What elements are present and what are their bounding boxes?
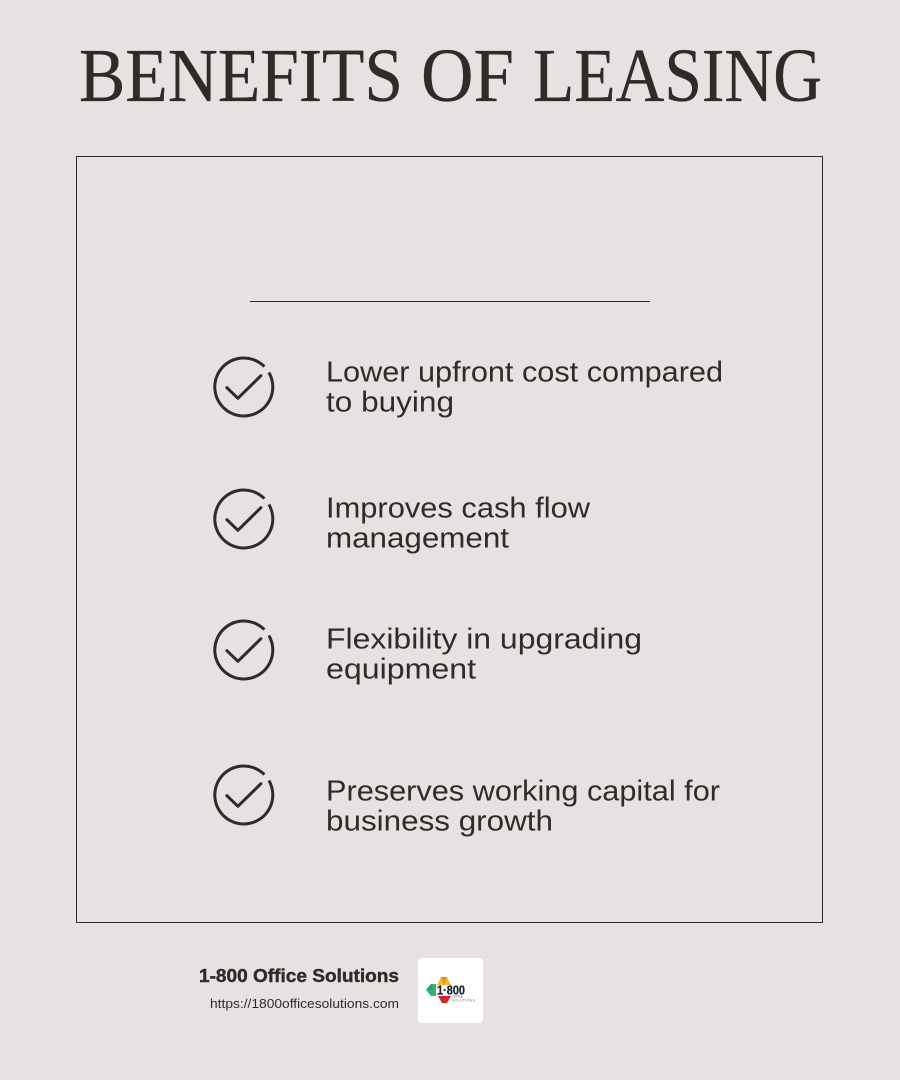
logo small text: SOLUTIONS bbox=[452, 998, 476, 1002]
benefit 2 text: Improves cash flow bbox=[326, 492, 590, 524]
logo tile bbox=[418, 958, 483, 1023]
title: LEASING bbox=[533, 34, 822, 118]
benefit 1 text: to buying bbox=[326, 386, 454, 418]
title: BENEFITS bbox=[79, 34, 403, 118]
logo mark: yellow bbox=[437, 977, 451, 985]
benefit 3 bbox=[215, 621, 642, 686]
logo small text: OFFICE bbox=[452, 995, 464, 999]
logo mark: orange facet bbox=[441, 977, 447, 985]
icon: check circle 2 bbox=[215, 490, 273, 548]
title: OF bbox=[421, 34, 514, 118]
logo mark: red bbox=[438, 996, 451, 1003]
benefit 1 bbox=[215, 356, 723, 418]
benefit 4 bbox=[215, 766, 721, 838]
icon: check circle 3 bbox=[215, 621, 273, 679]
footer company name: 1-800 Office Solutions bbox=[199, 966, 399, 986]
logo mark: teal facet bbox=[426, 984, 433, 990]
benefit 2 bbox=[215, 490, 590, 554]
benefit 2 text: management bbox=[326, 522, 509, 554]
logo mark: green bbox=[426, 984, 436, 996]
logo numerals: 1·800 bbox=[437, 984, 465, 998]
benefit 3 text: equipment bbox=[326, 654, 476, 686]
benefit 4 text: Preserves working capital for bbox=[326, 776, 721, 808]
footer url: https://1800officesolutions.com bbox=[210, 996, 399, 1011]
logo bbox=[418, 958, 483, 1023]
benefit 3 text: Flexibility in upgrading bbox=[326, 624, 642, 656]
benefit 4 text: business growth bbox=[326, 806, 553, 838]
icon: check circle 1 bbox=[215, 358, 273, 416]
divider line bbox=[250, 301, 650, 302]
panel: benefits frame bbox=[76, 156, 822, 922]
icon: check circle 4 bbox=[215, 766, 273, 824]
benefit 1 text: Lower upfront cost compared bbox=[326, 356, 723, 388]
title bbox=[79, 34, 822, 118]
